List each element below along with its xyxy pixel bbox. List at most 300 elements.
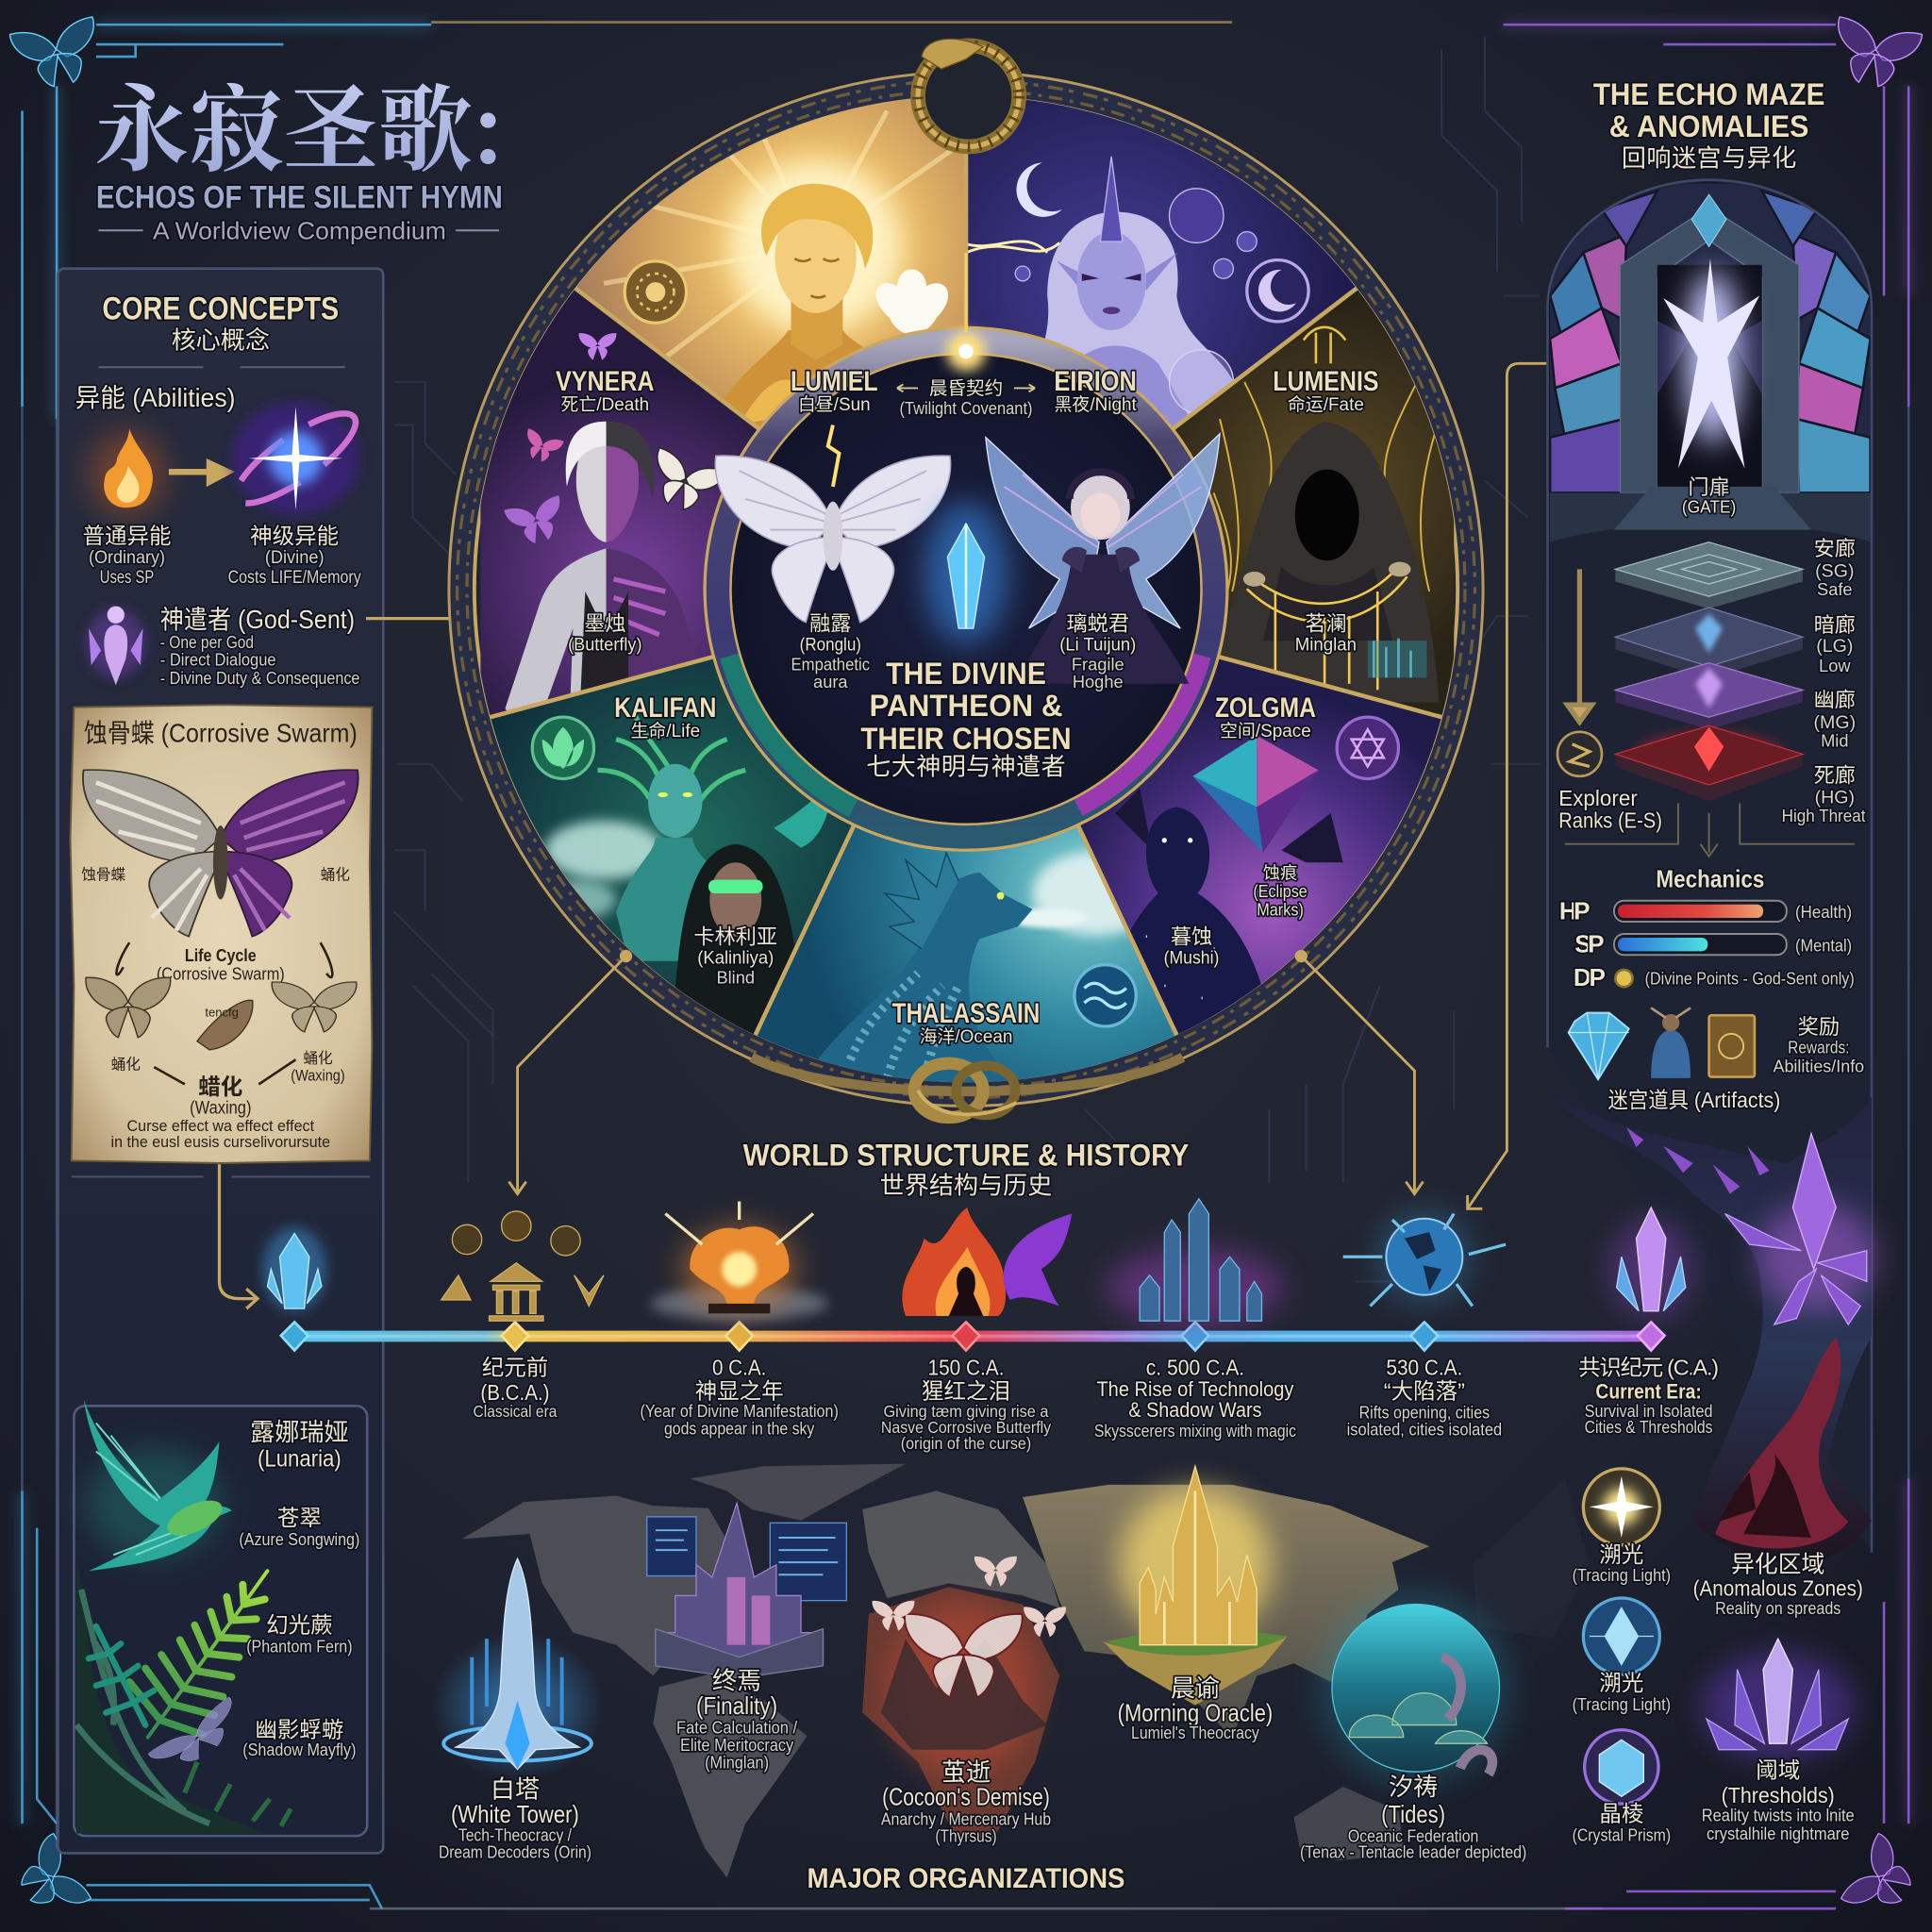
label: cocoon demise: (Cocoon's Demise) [882, 1782, 1050, 1810]
text: crystal prism: 晶棱 [1599, 1801, 1643, 1825]
icon: crystal prism [1585, 1730, 1658, 1804]
label: kalifan [614, 692, 717, 741]
label: low gallery: (LG) [1816, 636, 1853, 657]
label: 500 ca: Skysscerers mixing with magic [1094, 1421, 1296, 1441]
arrow: wheel to classical era [508, 951, 631, 1194]
text: azure songwing [239, 1506, 359, 1549]
label: finality: Fate Calculation / [676, 1718, 798, 1738]
label: ronglu: (Ronglu) [800, 635, 861, 656]
label: cocoon demise: 茧逝 [941, 1757, 991, 1786]
layer: safe [1615, 511, 1803, 608]
labels: chosen [568, 612, 1357, 987]
text: thresholds: (Thresholds) [1722, 1783, 1835, 1807]
bar: dp: (Divine Points - God-Sent only) [1645, 969, 1855, 989]
title: 永寂圣歌: [95, 56, 504, 190]
labels: maze layers: Safe [1817, 579, 1853, 599]
label: thalassain: THALASSAIN [892, 998, 1040, 1029]
label: finality: 终焉 [712, 1667, 761, 1695]
vines and foliage [76, 1558, 291, 1834]
heading: mechanics: Mechanics [1656, 864, 1764, 892]
bar: hp: HP [1559, 896, 1591, 924]
labels: deities [556, 366, 1379, 1047]
icon: white tower [431, 1558, 604, 1780]
bar: dp: DP [1574, 963, 1606, 991]
icon: ronglu moth [715, 425, 951, 623]
label: ronglu: 融露 [809, 612, 852, 636]
label: 150 ca [881, 1356, 1051, 1453]
parchment: corrosive swarm: in the eusl eusis curselivorursute [111, 1133, 330, 1151]
heading: core concepts [98, 291, 345, 367]
label: mid gallery: (MG) [1814, 712, 1856, 733]
label: high gallery: 死廊 [1814, 763, 1856, 787]
layer: low [1615, 608, 1803, 679]
label: mushi [1164, 924, 1219, 968]
label: kalifan: KALIFAN [614, 692, 717, 724]
label: eirion [1054, 366, 1138, 415]
stained glass gate [1549, 182, 1872, 542]
bottom frame line [370, 1907, 1602, 1909]
labels: timeline [474, 1356, 1719, 1453]
text: ordinary ability: Uses SP [100, 567, 154, 588]
wedge: vynera [480, 289, 757, 717]
heading: world structure: WORLD STRUCTURE & HISTORY [743, 1138, 1190, 1173]
text: ordinary ability: (Ordinary) [89, 547, 165, 568]
label: morning oracle: Lumiel's Theocracy [1131, 1723, 1260, 1742]
label: li tuijun [1059, 612, 1136, 691]
label: minglan: Minglan [1295, 635, 1357, 656]
text: tracing light 2: (Tracing Light) [1573, 1694, 1671, 1714]
icon: threshold crystals [1702, 1639, 1855, 1760]
label: morning oracle: (Morning Oracle) [1118, 1699, 1273, 1727]
label: cocoon demise: (Thyrsus) [935, 1826, 997, 1846]
label: zolgma [1215, 692, 1316, 741]
label: 530 ca: “大陷落” [1384, 1378, 1465, 1403]
label: tides [1300, 1773, 1526, 1862]
label: ronglu [791, 612, 870, 691]
text: thresholds [1702, 1758, 1855, 1843]
text: god-sent: - Divine Duty & Consequence [160, 668, 359, 688]
butterfly diagram [83, 770, 358, 937]
text: rewards: 奖励 [1798, 1015, 1840, 1039]
label: finality [676, 1667, 798, 1772]
pantheon wheel [450, 39, 1482, 1118]
text: lunaria [250, 1418, 349, 1472]
heading: core concepts: CORE CONCEPTS [102, 291, 339, 326]
tree: anomaly [1547, 1090, 1875, 1562]
icon: fire [88, 429, 166, 519]
heading: divine pantheon: THE DIVINE [886, 656, 1046, 691]
icon: rise of technology city [1107, 1199, 1284, 1327]
wedge: lumenis [1158, 277, 1454, 727]
text: tracing light 2: 溯光 [1599, 1671, 1643, 1695]
icon: li tuijun fairy [986, 434, 1220, 684]
heading: major organizations: MAJOR ORGANIZATIONS [808, 1863, 1124, 1894]
label: li tuijun: (Li Tuijun) [1059, 635, 1136, 656]
text: phantom fern: 幻光蕨 [266, 1613, 333, 1638]
text: artifacts: 迷宫道具 (Artifacts) [1607, 1088, 1780, 1112]
label: finality: (Finality) [696, 1691, 777, 1720]
icon: phantom fern [89, 1571, 267, 1738]
icon: god-sent figure [86, 607, 145, 685]
text: anomalous zones: 异化区域 [1731, 1552, 1824, 1578]
text: lunaria: (Lunaria) [258, 1446, 341, 1472]
wedge: eirion [968, 100, 1357, 426]
label: mushi: (Mushi) [1164, 947, 1219, 968]
inner ring [705, 327, 1227, 850]
icon: artifact gem [1569, 1013, 1629, 1079]
text: explorer ranks: Ranks (E-S) [1558, 808, 1662, 833]
text: shadow mayfly [242, 1718, 356, 1759]
wedge: kalifan [491, 659, 851, 1035]
icon: central crystal [924, 502, 1008, 644]
label: thalassain: 海洋/Ocean [920, 1026, 1012, 1047]
label: 500 ca: & Shadow Wars [1128, 1398, 1261, 1422]
label: kalinliya [693, 924, 777, 987]
label: bca: Classical era [474, 1402, 558, 1421]
label: butterfly: (Butterfly) [568, 635, 641, 656]
label: mid gallery [1814, 689, 1856, 751]
icon: start crystal [262, 1227, 326, 1311]
label: 0 ca: gods appear in the sky [664, 1418, 815, 1438]
text: anomalous zones [1693, 1552, 1863, 1618]
label: low gallery [1814, 613, 1856, 675]
label: 500 ca: c. 500 C.A. [1146, 1356, 1244, 1380]
parchment: corrosive swarm: 蜡化 [198, 1074, 242, 1099]
label: zolgma: 空间/Space [1220, 721, 1311, 741]
text: god-sent [160, 605, 359, 688]
parchment: corrosive swarm: (Waxing) [190, 1098, 251, 1119]
text: rewards: Rewards: [1788, 1038, 1849, 1058]
parchment: corrosive swarm: Curse effect wa effect effect [127, 1117, 314, 1135]
label: 500 ca: The Rise of Technology [1096, 1377, 1294, 1401]
parchment: corrosive swarm: 蛹化 [111, 1057, 141, 1074]
timeline [281, 1322, 1665, 1351]
text: divine ability: Costs LIFE/Memory [228, 567, 361, 588]
text: phantom fern: (Phantom Fern) [246, 1637, 353, 1657]
icon: scarlet tears fire and butterfly [902, 1208, 1072, 1316]
text: tracing light 1: (Tracing Light) [1573, 1565, 1671, 1585]
arrow: wheel to great fall [1296, 951, 1424, 1194]
heading: divine pantheon: THEIR CHOSEN [860, 721, 1072, 756]
text: explorer ranks [1558, 786, 1662, 833]
label: twilight covenant: (Twilight Covenant) [899, 398, 1033, 418]
heading: divine pantheon: 七大神明与神遣者 [866, 753, 1066, 781]
text: god-sent: 神遣者 (God-Sent) [160, 605, 355, 634]
text: thresholds: 阈域 [1756, 1758, 1800, 1783]
icon: explorer rank [1557, 732, 1602, 776]
label: lumenis: LUMENIS [1273, 366, 1379, 397]
maze layers [1615, 511, 1803, 801]
world map [462, 1464, 1590, 1878]
label: butterfly [568, 612, 641, 656]
text: lunaria: 露娜瑞娅 [250, 1418, 349, 1446]
icon: tracing light blue [1583, 1598, 1659, 1674]
label: bca: (B.C.A.) [480, 1380, 550, 1405]
parchment: corrosive swarm: Life Cycle [185, 945, 257, 965]
panel: core concepts [58, 269, 383, 1853]
icon: cocoon butterfly [872, 1557, 1066, 1750]
wedge: zolgma [1081, 658, 1441, 1035]
label: morning oracle: 晨谕 [1171, 1674, 1220, 1703]
icon: great fall globe [1343, 1210, 1506, 1306]
label: lumiel: LUMIEL [791, 366, 878, 397]
title: A Worldview Compendium [153, 216, 446, 244]
label: minglan: 茗澜 [1305, 612, 1347, 636]
icon: small butterfly [579, 333, 616, 359]
label: li tuijun: Hoghe [1073, 672, 1124, 691]
icon: bottom-right butterfly [1840, 1833, 1924, 1925]
parchment: corrosive swarm: 蚀骨蝶 [81, 867, 126, 884]
label: vynera: VYNERA [556, 366, 655, 397]
label: high gallery: (HG) [1815, 788, 1855, 808]
label: 150 ca: 猩红之泪 [922, 1378, 1010, 1403]
labels: maze layers: (SG) [1815, 560, 1854, 581]
label: lumenis: 命运/Fate [1288, 394, 1364, 415]
label: 530 ca: 530 C.A. [1386, 1356, 1462, 1380]
parchment: corrosive swarm: (Corrosive Swarm) [157, 963, 285, 983]
text: ordinary ability [83, 524, 172, 588]
label: tides: 汐祷 [1389, 1773, 1438, 1801]
label: thalassain [892, 998, 1040, 1047]
label: lumiel [791, 366, 878, 415]
title: ECHOS OF THE SILENT HYMN [96, 180, 503, 216]
wedge dividers [491, 98, 1441, 1035]
label: li tuijun: 璃蜕君 [1066, 612, 1129, 636]
text: azure songwing: (Azure Songwing) [239, 1529, 359, 1549]
label: 530 ca: Rifts opening, cities [1359, 1402, 1490, 1422]
label: finality: Elite Meritocracy [680, 1735, 794, 1755]
icon: current era crystal [1609, 1208, 1693, 1319]
right purple border [1503, 25, 1908, 1908]
label: 0 ca: 神显之年 [695, 1378, 784, 1403]
wedge: thalassain [755, 827, 1177, 1083]
label: white tower: Tech-Theocracy / [458, 1824, 573, 1844]
center disc [732, 355, 1200, 823]
text: anomalous zones: (Anomalous Zones) [1693, 1575, 1863, 1600]
label: ronglu: aura [813, 672, 848, 691]
text: gate: 门扉 [1688, 475, 1730, 499]
icon: moon emblem [1247, 260, 1308, 322]
label: mid gallery: 幽廊 [1814, 689, 1856, 712]
label: kalinliya: 卡林利亚 [693, 924, 777, 948]
text: rewards: Abilities/Info [1774, 1056, 1864, 1075]
text: crystal prism: (Crystal Prism) [1573, 1824, 1671, 1844]
text: anomalous zones: Reality on spreads [1715, 1598, 1840, 1618]
background circuit traces [394, 37, 1541, 1281]
label: morning oracle [1118, 1674, 1273, 1742]
label: mid gallery: Mid [1821, 731, 1849, 751]
label: eclipse marks: 蚀痕 [1263, 862, 1297, 882]
text: shadow mayfly: (Shadow Mayfly) [242, 1740, 356, 1759]
label: tides: (Tides) [1381, 1800, 1445, 1828]
panel: lunaria [74, 1400, 367, 1836]
left blue border [23, 25, 431, 1908]
knot: bottom ouroboros [752, 1058, 1183, 1118]
label: white tower: Dream Decoders (Orin) [439, 1842, 591, 1862]
wedge: lumiel [575, 99, 964, 426]
label: eclipse marks: Marks) [1257, 899, 1304, 919]
bar: sp: SP [1574, 930, 1605, 958]
label: white tower [439, 1775, 591, 1862]
icon: shadow mayfly [148, 1697, 248, 1781]
label: lumiel: 白昼/Sun [798, 394, 871, 415]
label: 0 ca: 0 C.A. [712, 1356, 766, 1380]
icon: divine manifestation explosion [651, 1201, 828, 1321]
label: kalinliya: Blind [716, 967, 755, 987]
label: minglan [1295, 612, 1357, 656]
life cycle sketches [86, 942, 357, 1084]
label: 150 ca: 150 C.A. [928, 1356, 1004, 1380]
label: 150 ca: (origin of the curse) [901, 1434, 1031, 1453]
label: eirion: 黑夜/Night [1055, 394, 1138, 415]
label: tides: (Tenax - Tentacle leader depicted) [1300, 1842, 1526, 1862]
text: tracing light 1: 溯光 [1599, 1542, 1643, 1567]
arrow: swarm to timeline [219, 1164, 258, 1308]
text: god-sent: - Direct Dialogue [160, 649, 276, 669]
icon: artifact figure [1651, 1008, 1690, 1078]
abilities heading: 异能 (Abilities) [75, 383, 235, 412]
bar: hp [1559, 896, 1852, 924]
label: 150 ca: Nasve Corrosive Butterfly [881, 1418, 1051, 1437]
icon: tracing light gold [1583, 1469, 1659, 1545]
text: azure songwing: 苍翠 [277, 1506, 322, 1530]
label: low gallery: 暗廊 [1814, 613, 1856, 637]
icon: artifact book [1709, 1015, 1755, 1077]
label: tides: Oceanic Federation [1348, 1826, 1478, 1846]
icon: life emblem [532, 717, 594, 778]
icon: space emblem [1337, 717, 1398, 778]
labels: organizations [439, 1667, 1526, 1862]
heading: world structure [743, 1138, 1190, 1200]
text: god-sent: - One per God [160, 632, 254, 652]
icon: sun emblem [625, 261, 687, 323]
label: kalinliya: (Kalinliya) [697, 947, 774, 968]
icon: galaxy [225, 399, 367, 518]
heading: echo maze: THE ECHO MAZE [1593, 76, 1824, 111]
label: twilight covenant: 晨昏契约 [929, 378, 1003, 399]
label: 0 ca: (Year of Divine Manifestation) [641, 1401, 839, 1421]
label: current era: Current Era: [1595, 1379, 1702, 1403]
icon: tides dome [1319, 1592, 1510, 1784]
canopy crystals [1626, 1127, 1875, 1324]
text: divine ability: 神级异能 [250, 524, 339, 548]
icon: finality city [647, 1503, 846, 1678]
icon: fate emblem [1304, 327, 1345, 363]
parchment: corrosive swarm: 蛹化 [303, 1050, 333, 1067]
text: divine ability [228, 524, 361, 588]
text: shadow mayfly: 幽影蜉蝣 [255, 1718, 343, 1742]
label: high gallery [1782, 763, 1865, 825]
label: vynera: 死亡/Death [561, 394, 649, 415]
text: phantom fern [246, 1613, 353, 1657]
label: current era: 共识纪元 (C.A.) [1578, 1356, 1719, 1380]
heading: core concepts: 核心概念 [172, 326, 270, 355]
text: ordinary ability: 普通异能 [83, 524, 172, 548]
label: li tuijun: Fragile [1072, 655, 1124, 675]
label: cocoon demise: Anarchy / Mercenary Hub [881, 1808, 1051, 1828]
text: tracing light 2 [1573, 1671, 1671, 1714]
heading: divine pantheon: PANTHEON & [869, 688, 1063, 723]
icon: top-left butterfly [9, 17, 105, 93]
label: white tower: (White Tower) [451, 1800, 579, 1828]
top gold frame line [431, 22, 1232, 24]
text: gate: (GATE) [1682, 496, 1736, 516]
label: butterfly: 墨烛 [584, 612, 625, 636]
label: eirion: EIRION [1054, 366, 1137, 397]
label: current era [1578, 1356, 1719, 1437]
icon: twilight star [946, 253, 986, 371]
label: twilight covenant [897, 378, 1035, 418]
knot: top ouroboros [918, 39, 1019, 146]
label: 150 ca: Giving tæm giving rise a [883, 1402, 1049, 1421]
bar: hp: (Health) [1795, 902, 1852, 922]
label: high gallery: High Threat [1782, 806, 1865, 825]
arrow: to mechanics [1565, 804, 1855, 857]
label: low gallery: Low [1819, 656, 1851, 675]
icon: top-right butterfly [1827, 17, 1923, 93]
labels: maze layers: 安廊 [1814, 537, 1856, 560]
label: finality: (Minglan) [705, 1752, 769, 1772]
arrow: maze link [1468, 355, 1567, 1208]
timeline markers [281, 1322, 1665, 1351]
bar: sp [1574, 930, 1852, 958]
label: ronglu: Empathetic [791, 655, 870, 675]
text: thresholds: Reality twists into lnite [1702, 1805, 1855, 1824]
icon: azure songwing bird [84, 1400, 232, 1571]
red root [1715, 1337, 1848, 1548]
text: tracing light 1 [1573, 1542, 1671, 1585]
parchment: corrosive swarm: tencfg [205, 1006, 239, 1020]
wheel rim [450, 73, 1482, 1106]
heading: world structure: 世界结构与历史 [880, 1172, 1052, 1200]
text: explorer ranks: Explorer [1558, 786, 1638, 810]
text: gate [1682, 475, 1736, 516]
icon: morning oracle city [1103, 1466, 1288, 1706]
heading: echo maze [1593, 76, 1824, 172]
label: eclipse marks [1253, 862, 1307, 919]
text: divine ability: (Divine) [265, 547, 325, 568]
parchment: corrosive swarm [70, 705, 372, 1163]
arrow [169, 463, 228, 482]
label: bca: 纪元前 [482, 1356, 548, 1380]
label: 0 ca [641, 1356, 839, 1438]
parchment: corrosive swarm: 蛹化 [321, 867, 350, 884]
bar: sp: (Mental) [1795, 935, 1852, 955]
heading: echo maze: & ANOMALIES [1609, 108, 1808, 143]
labels: maze layers [1782, 537, 1865, 825]
label: kalifan: 生命/Life [631, 721, 700, 741]
icon: classical era [441, 1211, 604, 1321]
panel: echo maze [1547, 76, 1872, 1553]
label: lumenis [1273, 366, 1379, 415]
icon: ocean emblem [1074, 965, 1136, 1026]
parchment: corrosive swarm: (Waxing) [291, 1066, 345, 1084]
label: 530 ca [1347, 1356, 1502, 1440]
label: 500 ca [1094, 1356, 1296, 1441]
label: zolgma: ZOLGMA [1215, 692, 1316, 724]
text: thresholds: crystalhile nightmare [1707, 1824, 1849, 1843]
bar: dp [1574, 963, 1855, 991]
arrow: descent [1567, 569, 1592, 722]
label: current era: Survival in Isolated [1585, 1401, 1713, 1421]
parchment: corrosive swarm: 蚀骨蝶 (Corrosive Swarm) [84, 718, 358, 747]
layer: high threat [1615, 725, 1803, 801]
arrow: god-sent to pantheon [366, 610, 474, 627]
text: rewards [1774, 1015, 1864, 1075]
label: current era: Cities & Thresholds [1585, 1417, 1713, 1437]
heading: divine pantheon [860, 656, 1072, 781]
label: mushi: 暮蚀 [1171, 924, 1212, 948]
